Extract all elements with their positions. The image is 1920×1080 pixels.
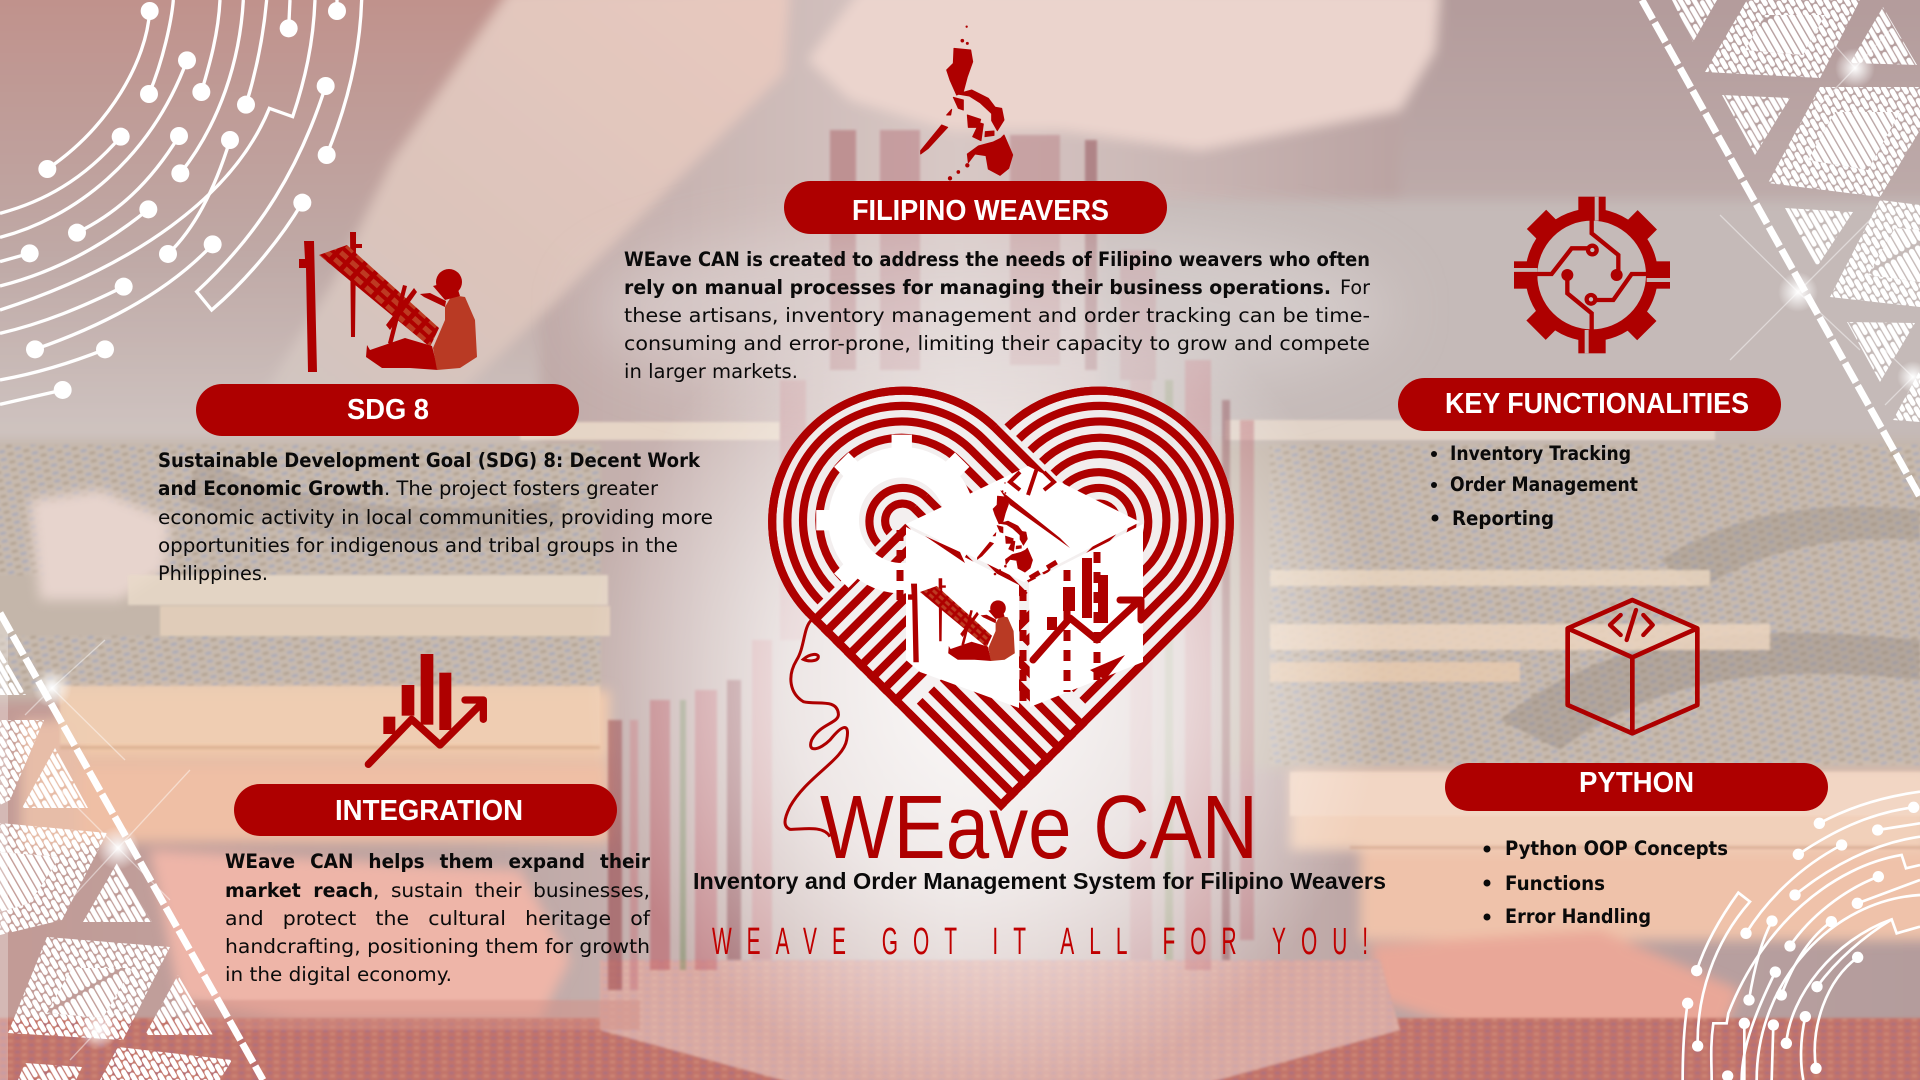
central light glow <box>585 260 1385 1080</box>
decoration: tribal weave pattern bottom-left <box>0 613 263 1080</box>
text block: Integration description <box>225 850 651 986</box>
weaver on box <box>908 578 1015 662</box>
gear cut-out <box>816 435 969 588</box>
text block: SDG 8 description: opportunities for indigenous and tribal groups in the <box>158 534 678 557</box>
text block: Integration description: and protect the cultural heritage of <box>225 907 651 930</box>
list: python topics <box>1484 837 1728 928</box>
heart backing <box>772 391 1230 805</box>
text block: SDG 8 description: economic activity in local communities, providing more <box>158 506 713 529</box>
woven mats <box>0 445 1920 765</box>
map on box <box>977 483 1033 575</box>
text block: Filipino Weavers description: WEave CAN is created to address the needs of Filipino weavers who often <box>624 248 1370 271</box>
chart on box <box>1033 558 1141 660</box>
heart stripes: right lobe <box>810 386 1234 716</box>
heading pill: Python <box>1445 763 1828 811</box>
code symbol on box <box>1010 468 1054 495</box>
woven floor <box>0 960 1920 1080</box>
heading pill: Filipino Weavers <box>784 181 1167 234</box>
heading pill: SDG 8: SDG 8 <box>347 394 429 426</box>
text block: Integration description: handcrafting, positioning them for growth <box>225 935 650 958</box>
text block: SDG 8 description: Philippines. <box>158 562 268 585</box>
subtitle: Inventory and Order Management System for Filipino Weavers <box>693 868 1386 894</box>
list: key functionalities: Reporting <box>1452 507 1554 530</box>
heading pill: SDG 8 <box>196 384 579 436</box>
text block: SDG 8 description <box>158 449 713 585</box>
decoration: tribal weave pattern top-right <box>1642 0 1920 497</box>
text block: Integration description: market reach <box>225 879 373 902</box>
list: key functionalities <box>1431 442 1638 530</box>
text block: Integration description: , sustain their businesses, <box>373 879 650 902</box>
icon: code cube <box>1568 600 1697 733</box>
list: python topics: Python OOP Concepts <box>1505 837 1728 860</box>
text block: Filipino Weavers description: in larger markets. <box>624 360 798 383</box>
heart outline <box>772 391 1230 805</box>
panel: SDG 8 <box>158 232 713 585</box>
list: python topics: Functions <box>1505 872 1605 895</box>
panel: Filipino Weavers <box>624 181 1371 383</box>
text block: Filipino Weavers description: these artisans, inventory management and order tracking can be time- <box>624 304 1370 327</box>
text block: Filipino Weavers description: rely on manual processes for managing their business operations. <box>624 276 1331 299</box>
heading pill: Integration: INTEGRATION <box>335 795 523 827</box>
panel: Key Functionalities <box>1398 197 1781 530</box>
heading pill: Key Functionalities: KEY FUNCTIONALITIES <box>1445 388 1749 420</box>
panel: Python <box>1445 600 1828 928</box>
heart artwork <box>772 391 1230 808</box>
decoration: circuit lines top-left <box>0 0 362 404</box>
decoration: circuit lines bottom-right <box>1682 792 1920 1080</box>
text block: SDG 8 description: Sustainable Development Goal (SDG) 8: Decent Work <box>158 449 701 472</box>
woven fabric stripes <box>608 130 1254 990</box>
center logo: woven heart with box <box>772 391 1230 837</box>
text block: Integration description: in the digital economy. <box>225 963 452 986</box>
icon: growth chart <box>368 654 483 764</box>
icon: Philippines map <box>921 26 1013 180</box>
heading pill: Python: PYTHON <box>1579 767 1694 799</box>
text block: SDG 8 description: and Economic Growth <box>158 477 384 500</box>
bamboo rods <box>60 420 1920 849</box>
text block: Filipino Weavers description <box>624 248 1371 383</box>
heart stripes: left lobe <box>768 386 1088 811</box>
text block: Filipino Weavers description: For <box>1340 276 1371 299</box>
box cut-out <box>900 466 1143 708</box>
heading pill: Filipino Weavers: FILIPINO WEAVERS <box>852 195 1109 227</box>
icon: circuit gear <box>1514 197 1670 353</box>
icon: weaver at loom <box>299 232 477 372</box>
heading pill: Integration <box>234 784 617 836</box>
text block: Integration description: WEave CAN helps them expand their <box>225 850 650 873</box>
tagline: WEAVE GOT IT ALL FOR YOU! <box>712 921 1368 963</box>
list: key functionalities: Inventory Tracking <box>1450 442 1631 465</box>
list: key functionalities: Order Management <box>1450 473 1638 496</box>
title: WEave CAN: WEave CAN <box>820 778 1258 878</box>
loose thread <box>785 620 848 837</box>
heading pill: Key Functionalities <box>1398 378 1781 431</box>
text block: Filipino Weavers description: consuming and error-prone, limiting their capacity to grow and compete <box>624 332 1370 355</box>
panel: Integration <box>225 654 651 986</box>
text block: SDG 8 description: . The project fosters greater <box>384 477 659 500</box>
list: python topics: Error Handling <box>1505 905 1651 928</box>
